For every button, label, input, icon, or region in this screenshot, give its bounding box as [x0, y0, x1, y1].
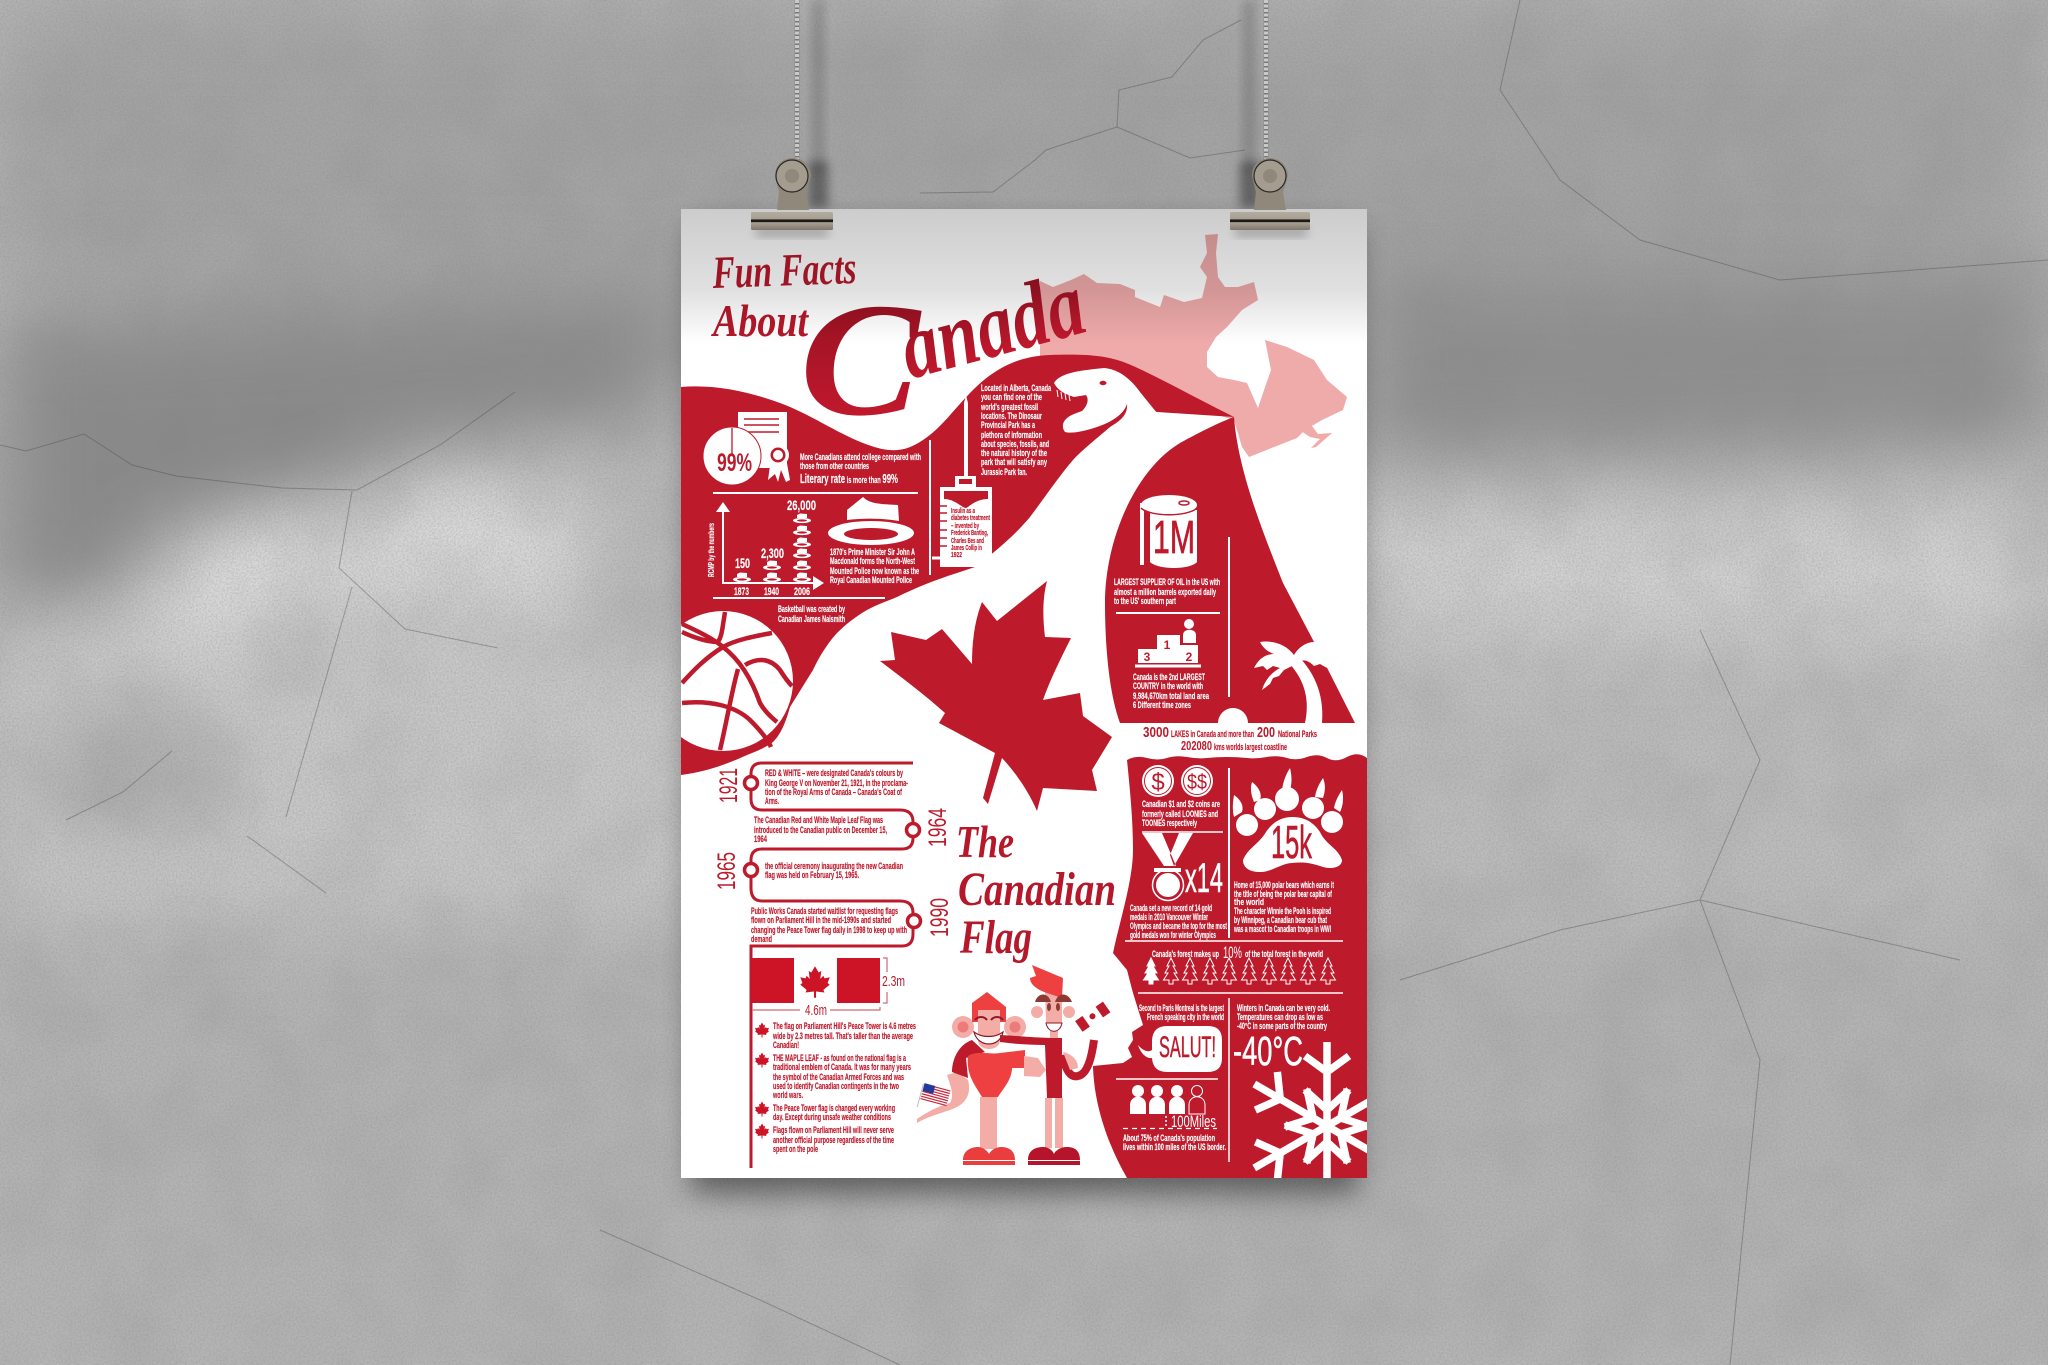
timeline of the flag: King George V on November 21, 1921, in the proclama- — [765, 778, 908, 789]
red panel: bottom right with face silhouette — [1093, 754, 1367, 1178]
fact: dinosaur park text: Provincial Park has a — [981, 420, 1035, 431]
fact: oil supplier: to the US' southern part — [1114, 596, 1176, 607]
fact: forest with tree row — [1138, 943, 1343, 1162]
timeline of the flag: RED & WHITE – were designated Canada's colours by — [765, 768, 903, 779]
illustration: two cartoon friends — [917, 965, 1110, 1165]
timeline of the flag: Public Works Canada started waitlist for requesting flags — [751, 906, 898, 917]
timeline of the flag: tion of the Royal Arms of Canada – Canada's Coat of — [765, 787, 902, 798]
fact: oil supplier: almost a million barrels exported daily — [1114, 587, 1216, 598]
fact: literacy rate: Literary rate is more than 99% — [800, 471, 898, 486]
timeline nodes — [744, 776, 920, 928]
fact: insulin syringe: Charles Bes and — [951, 538, 984, 545]
icon: left binder clip — [751, 158, 833, 236]
fact: insulin syringe: – invented by — [951, 523, 979, 530]
fact: winter temperature: Temperatures can drop as low as — [1237, 1012, 1323, 1023]
fact: winter temperature: -40°C — [1233, 1028, 1303, 1074]
timeline of the flag: flown on Parliament Hill in the mid-1990s and started — [751, 915, 891, 926]
fact: polar bears: the title of being the polar bear capital of — [1234, 889, 1332, 900]
fact: winter temperature — [1233, 1003, 1411, 1210]
fact: dinosaur park text: the natural history of the — [981, 448, 1047, 459]
timeline of the flag: changing the Peace Tower flag daily in 1998 to keep up with — [751, 925, 907, 936]
chart: RCMP by the numbers — [706, 497, 824, 598]
icon: leaf bullets — [755, 1022, 769, 1138]
icon: podium: 2 — [1186, 650, 1193, 664]
fact: basketball: Canadian James Naismith — [778, 614, 845, 625]
icon: mountie hat and RCMP text — [713, 497, 919, 598]
timeline of the flag: 1964 — [924, 808, 952, 847]
fact: Olympic gold medals — [1130, 768, 1229, 941]
fact: insulin syringe — [930, 395, 992, 575]
right character — [1000, 965, 1110, 1165]
flag facts list: spent on the pole — [773, 1144, 818, 1155]
flag facts list: another official purpose regardless of the time — [773, 1135, 894, 1146]
fact: Olympic gold medals: medals in 2010 Vancouver Winter — [1130, 912, 1208, 923]
paper shading at top of poster — [681, 209, 1367, 344]
fact: winter temperature: -40°C in some parts of the country — [1237, 1021, 1327, 1032]
timeline of the flag — [713, 763, 954, 1168]
title: Fun Facts About Canada — [711, 254, 1086, 416]
fact: literacy rate: those from other countries — [800, 461, 869, 472]
icon: bear paw: 15k — [1271, 816, 1313, 868]
icon: maple leaf — [880, 581, 1112, 811]
timeline of the flag: Arms. — [765, 796, 779, 807]
fact: Montreal French speech bubble: SALUT! — [1159, 1031, 1216, 1064]
fact: dinosaur park text: park that will satisfy any — [981, 457, 1047, 468]
poster: Second to Paris Montreal is the largest — [1139, 1003, 1224, 1014]
icon: coins: $ — [1151, 769, 1165, 796]
fact: basketball — [681, 605, 845, 751]
hanging strings and wall shadows — [797, 0, 1266, 208]
flag facts list: Canadian! — [773, 1040, 799, 1051]
fact: winter temperature: Winters in Canada can be very cold. — [1237, 1003, 1330, 1014]
flag facts list — [755, 1021, 916, 1155]
lakes and coastline text: 200 — [1257, 724, 1275, 741]
fact: population near US border: 100Miles — [1171, 1112, 1216, 1131]
fact: literacy rate: More Canadians attend college compared with — [800, 452, 921, 463]
fact: polar bears: by Winnipeg, a Canadian bear cub that — [1234, 915, 1327, 926]
fact: dinosaur park text: plethora of information — [981, 430, 1042, 441]
timeline of the flag: The Canadian Red and White Maple Leaf Flag was — [754, 815, 883, 826]
poster — [681, 209, 1367, 1178]
flag facts list: Flags flown on Parliament Hill will never serve — [773, 1125, 894, 1136]
lakes and coastline text: 202080 — [1181, 738, 1212, 753]
fact: dinosaur park text: you can find one of the — [981, 392, 1042, 403]
fact: Olympic gold medals: Olympics and became the top for the most — [1130, 921, 1227, 932]
icon: mountie hat and RCMP text: Mounted Police now known as the — [830, 566, 919, 577]
flag diagram with dimensions — [752, 958, 905, 1019]
icon: 99% pie: 99% — [717, 449, 752, 477]
fact: oil supplier: LARGEST SUPPLIER OF OIL in the US with — [1114, 577, 1220, 588]
timeline of the flag: 1921 — [715, 768, 743, 803]
icon: podium: 3 — [1144, 650, 1151, 664]
lakes and coastline text: kms worlds largest coastline — [1214, 742, 1287, 753]
chart: RCMP by the numbers: 26,000 — [787, 497, 816, 513]
fact: insulin syringe: James Collip in — [951, 545, 982, 552]
Canadian hand flag — [1075, 1002, 1110, 1032]
flag facts list: used to identify Canadian contingents in the two — [773, 1081, 899, 1092]
lakes and coastline text: National Parks — [1278, 729, 1317, 740]
fact: second largest country: Canada is the 2nd LARGEST — [1133, 672, 1205, 683]
fact: dinosaur park text: Located in Alberta, Canada — [981, 383, 1051, 394]
icon: mountie hat and RCMP text: 1870's Prime Minister Sir John A — [830, 547, 915, 558]
fact: polar bears — [1125, 768, 1343, 941]
American hand flag — [917, 1083, 951, 1114]
heading: The Canadian Flag: The — [956, 816, 1014, 867]
fact: forest with tree row: Canada's forest makes up — [1152, 949, 1219, 960]
icon: palm tree and sun — [1218, 642, 1327, 723]
flag facts list: world wars. — [772, 1090, 803, 1101]
fact: polar bears: The character Winnie the Pooh is inspired — [1234, 906, 1331, 917]
left character — [917, 992, 1046, 1165]
chart: RCMP by the numbers: 2006 — [794, 586, 810, 598]
icon: coins — [1142, 765, 1213, 797]
chart: RCMP by the numbers: 150 — [735, 555, 750, 571]
red panel: oil and country size — [1105, 417, 1355, 723]
fact: polar bears: the world — [1234, 897, 1264, 908]
flag facts list: the symbol of the Canadian Armed Forces and was — [773, 1072, 904, 1083]
fact: dinosaur park text: about species, fossils, and — [981, 439, 1049, 450]
chart: RCMP by the numbers: 1940 — [764, 586, 779, 598]
timeline of the flag: 1990 — [926, 898, 954, 937]
lakes and coastline text: 3000 — [1143, 724, 1169, 741]
title: Fun Facts About Canada: C — [800, 271, 922, 450]
map of Canada — [1040, 234, 1347, 457]
flag facts list: traditional emblem of Canada. It was for many years — [773, 1062, 911, 1073]
fact: polar bears: was a mascot to Canadian troops in WWI — [1233, 924, 1331, 935]
icon: certificate — [738, 412, 787, 468]
flag facts list: THE MAPLE LEAF - as found on the national flag is a — [773, 1053, 906, 1064]
fact: insulin syringe: 1922 — [951, 552, 962, 559]
fact: loonies and toonies: formerly called LOONIES and — [1142, 809, 1218, 820]
fact: literacy rate — [703, 412, 921, 493]
flag facts list: The flag on Parliament Hill's Peace Tower is 4.6 metres — [773, 1021, 916, 1032]
fact: population near US border: lives within 100 miles of the US border. — [1123, 1142, 1226, 1153]
timeline of the flag: demand — [751, 934, 772, 945]
fact: insulin syringe: Frederick Banting, — [951, 530, 988, 537]
fact: loonies and toonies — [1142, 765, 1223, 832]
fact: Montreal French speech bubble — [1116, 1003, 1224, 1079]
icon: podium — [1135, 619, 1201, 668]
fact: Olympic gold medals: gold medals won for winter Olympics — [1130, 930, 1216, 941]
fact: dinosaur park text: locations. The Dinosaur — [981, 411, 1042, 422]
timeline of the flag: flag was held on February 15, 1965. — [765, 870, 859, 881]
timeline of the flag: 1964 — [754, 834, 767, 845]
icon: oil barrel: 1M — [1153, 511, 1195, 563]
heading: The Canadian Flag: Flag — [959, 911, 1032, 964]
title: Fun Facts About Canada: Fun Facts — [711, 242, 857, 298]
icon: right binder clip — [1230, 158, 1310, 236]
fact: population near US border — [1123, 1085, 1226, 1153]
fact: second largest country: 6 Different time zones — [1133, 700, 1191, 711]
fact: second largest country: COUNTRY in the world with — [1133, 681, 1203, 692]
fact: insulin syringe: diabetes treatment — [951, 515, 990, 522]
fact: forest with tree row: 10% — [1223, 943, 1242, 962]
heading: The Canadian Flag: Canadian — [958, 863, 1116, 916]
flag diagram with dimensions: 2.3m — [882, 973, 905, 990]
flag diagram with dimensions: 4.6m — [805, 1002, 827, 1019]
fact: loonies and toonies: TOONIES respectively — [1142, 818, 1197, 829]
icon: rosette — [768, 448, 790, 482]
timeline of the flag: the official ceremony inaugurating the new Canadian — [765, 861, 903, 872]
flag facts list: day. Except during unsafe weather conditions — [773, 1112, 891, 1123]
poster shadow — [690, 225, 1358, 1193]
fact: forest with tree row: of the total forest in the world — [1245, 949, 1323, 960]
icon: mountie hat and RCMP text: Royal Canadian Mounted Police — [830, 575, 912, 586]
fact: loonies and toonies: Canadian $1 and $2 coins are — [1142, 799, 1220, 810]
title: Fun Facts About Canada: anada — [889, 252, 1095, 398]
chart: RCMP by the numbers: 2,300 — [761, 545, 784, 561]
fact: dinosaur park text — [980, 383, 1051, 478]
timeline of the flag: introduced to the Canadian public on December 15, — [754, 825, 887, 836]
title: Fun Facts About Canada: About — [711, 295, 809, 346]
icon: dinosaur head — [1054, 368, 1157, 433]
chart: RCMP by the numbers: RCMP by the numbers — [706, 523, 716, 577]
icon: podium: 1 — [1164, 638, 1171, 652]
icon: bear paw — [1233, 768, 1343, 872]
red wave panel with white dinosaur body — [681, 355, 1234, 775]
icon: medal — [1142, 833, 1193, 900]
icon: snowflake — [1243, 1042, 1411, 1210]
lakes and coastline text: LAKES in Canada and more than — [1171, 729, 1254, 740]
fact: Montreal French speech bubble: French speaking city in the world — [1147, 1012, 1224, 1023]
fact: polar bears: Home of 15,000 polar bears which earns it — [1234, 880, 1334, 891]
chart: RCMP by the numbers: 1873 — [734, 586, 749, 598]
lakes and coastline text — [1143, 724, 1317, 753]
fact: dinosaur park text: world's greatest fossil — [980, 402, 1038, 413]
icon: coins: $$ — [1187, 771, 1207, 794]
fact: population near US border: About 75% of Canada's population — [1123, 1133, 1215, 1144]
icon: basketball — [681, 611, 793, 751]
icon: tree row — [1144, 958, 1336, 984]
fact: Olympic gold medals: Canada set a new record of 14 gold — [1130, 903, 1212, 914]
flag facts list: The Peace Tower flag is changed every working — [773, 1103, 895, 1114]
flag facts list: wide by 2.3 metres tall. That's taller than the average — [772, 1031, 913, 1042]
fact: insulin syringe: Insulin as a — [951, 508, 975, 515]
fact: basketball: Basketball was created by — [778, 604, 845, 615]
timeline of the flag: 1965 — [713, 852, 741, 890]
fact: Olympic gold medals: x14 — [1185, 854, 1223, 901]
fact: second largest country: 9,984,670km total land area — [1133, 691, 1209, 702]
icon: people — [1130, 1085, 1205, 1114]
heading: The Canadian Flag — [956, 816, 1116, 964]
fact: oil supplier — [1114, 495, 1220, 613]
icon: mountie hat and RCMP text: Macdonald forms the North-West — [830, 556, 915, 567]
icon: 99% pie — [703, 427, 761, 485]
fact: second largest country — [1133, 537, 1229, 711]
fact: dinosaur park text: Jurassic Park fan. — [981, 467, 1027, 478]
